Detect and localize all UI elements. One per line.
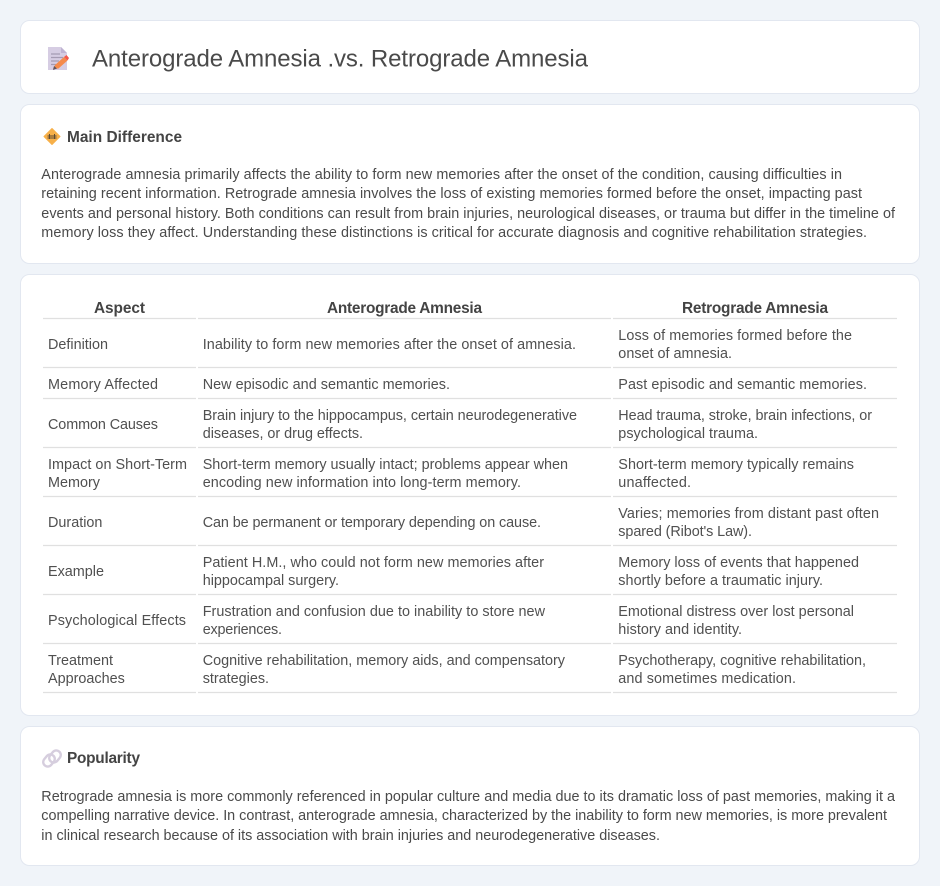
row: memory affected: Memory Affected: [48, 377, 158, 393]
panel: header: [20, 20, 920, 94]
text block: popularity: Retrograde amnesia is more commonly referenced in popular culture and media due to its dramatic loss of past memories, making it a: [41, 789, 895, 805]
icon: link: [41, 749, 63, 768]
row: impact on short-term memory: Short-term memory typically remains: [618, 457, 854, 473]
row: example: Example: [48, 564, 104, 580]
text block: popularity: in clinical research because of its association with brain injuries and neurodegenerative diseases.: [41, 828, 660, 844]
row: treatment approaches: and sometimes medication.: [618, 671, 796, 687]
row: duration: Varies; memories from distant past often: [618, 506, 879, 522]
table header: [94, 300, 828, 317]
row: common causes: psychological trauma.: [618, 426, 758, 442]
row: treatment approaches: Cognitive rehabilitation, memory aids, and compensatory: [203, 653, 566, 669]
row: treatment approaches: Psychotherapy, cognitive rehabilitation,: [618, 653, 866, 669]
row: example: shortly before a traumatic injury.: [618, 573, 823, 589]
heading: main difference: Main Difference: [67, 129, 182, 146]
row: duration: [48, 506, 879, 540]
row: common causes: Brain injury to the hippocampus, certain neurodegenerative: [203, 408, 577, 424]
row: example: hippocampal surgery.: [203, 573, 339, 589]
row: common causes: [48, 408, 872, 442]
row: treatment approaches: strategies.: [203, 671, 269, 687]
panel: main difference: [20, 104, 920, 264]
row: psychological effects: Emotional distress over lost personal: [618, 604, 854, 620]
panel: popularity: [20, 726, 920, 866]
row: psychological effects: Psychological Effects: [48, 613, 186, 629]
row: example: Patient H.M., who could not form new memories after: [203, 555, 544, 571]
row: duration: Duration: [48, 515, 102, 531]
row: impact on short-term memory: Short-term memory usually intact; problems appear when: [203, 457, 568, 473]
text block: popularity: compelling narrative device. In contrast, anterograde amnesia, characterized by the inability to form new memories, is more prevalent: [41, 808, 887, 824]
row: psychological effects: history and identity.: [618, 622, 742, 638]
row: impact on short-term memory: unaffected.: [618, 475, 691, 491]
row: duration: spared (Ribot's Law).: [618, 524, 752, 540]
row: memory affected: Past episodic and semantic memories.: [618, 377, 867, 393]
text block: main difference: memory loss they affect. Understanding these distinctions is critical for accurate diagnosis and cognitive rehabilitation strategies.: [41, 225, 867, 241]
table header: Anterograde Amnesia: [327, 300, 482, 317]
row: memory affected: New episodic and semantic memories.: [203, 377, 450, 393]
row: example: Memory loss of events that happened: [618, 555, 859, 571]
text block: popularity: [41, 789, 895, 844]
text block: main difference: events and personal history. Both conditions can result from brain injuries, neurological diseases, or trauma but differ in the timeline of: [41, 206, 896, 222]
row: common causes: Head trauma, stroke, brain infections, or: [618, 408, 872, 424]
row: impact on short-term memory: Memory: [48, 475, 101, 491]
row: treatment approaches: [48, 653, 866, 687]
row: impact on short-term memory: Impact on Short-Term: [48, 457, 187, 473]
table header: Aspect: [94, 300, 145, 317]
text block: main difference: retaining recent information. Retrograde amnesia involves the loss of existing memories formed before the onset, impacting past: [41, 186, 862, 202]
row: treatment approaches: Approaches: [48, 671, 125, 687]
row: impact on short-term memory: encoding new information into long-term memory.: [203, 475, 521, 491]
row: memory affected: [48, 377, 867, 393]
heading: popularity: Popularity: [67, 750, 140, 767]
row: definition: onset of amnesia.: [618, 346, 732, 362]
panel: comparison table: [20, 274, 920, 716]
row: definition: Inability to form new memories after the onset of amnesia.: [203, 337, 576, 353]
text block: main difference: Anterograde amnesia primarily affects the ability to form new memories after the onset of the condition, causing difficulties in: [41, 167, 842, 183]
text block: main difference: [41, 167, 896, 241]
row: treatment approaches: Treatment: [48, 653, 113, 669]
row: common causes: diseases, or drug effects.: [203, 426, 363, 442]
icon: warning diamond: [44, 128, 60, 144]
row: common causes: Common Causes: [48, 417, 158, 433]
row: definition: Definition: [48, 337, 108, 353]
row: example: [48, 555, 859, 589]
row: impact on short-term memory: [48, 457, 854, 491]
row: definition: Loss of memories formed before the: [618, 328, 852, 344]
row: definition: [48, 328, 852, 362]
row: duration: Can be permanent or temporary depending on cause.: [203, 515, 541, 531]
icon: memo with pencil: [48, 47, 69, 70]
table header: Retrograde Amnesia: [682, 300, 828, 317]
row: psychological effects: experiences.: [203, 622, 282, 638]
row: psychological effects: Frustration and confusion due to inability to store new: [203, 604, 546, 620]
row: psychological effects: [48, 604, 854, 638]
title: Anterograde Amnesia .vs. Retrograde Amnesia: [92, 46, 589, 72]
